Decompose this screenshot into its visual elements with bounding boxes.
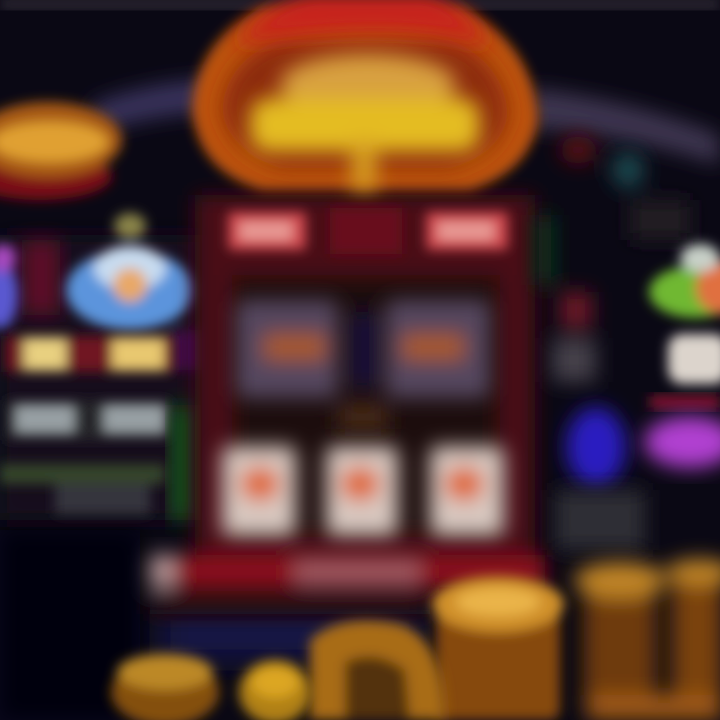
central machine: lower reels: [222, 446, 504, 536]
left machine: round blue lamp: [0, 213, 202, 370]
central machine: cabinet: [195, 195, 535, 575]
right: rainbow lamp: [649, 244, 720, 318]
right: red band: [650, 396, 720, 408]
right: pillar lights: [537, 136, 690, 382]
right: white panel: [668, 334, 720, 384]
gold coins: [111, 559, 720, 720]
right: grey stand: [555, 490, 645, 550]
central machine: golden sign lettering: [250, 54, 480, 190]
coin stack: far right: [574, 559, 720, 720]
left machine: [0, 102, 202, 520]
central machine: base strip: [150, 555, 545, 614]
central machine: [150, 0, 545, 614]
left machine: reels: [0, 400, 170, 514]
right: purple panel: [644, 416, 720, 468]
left machine: top sign: [0, 102, 122, 200]
left machine: green edge: [172, 405, 194, 520]
right: blue globe: [566, 407, 626, 487]
left machine: light strip: [5, 336, 175, 372]
coin stack: tall center: [432, 576, 564, 720]
left machine: cabinet: [0, 235, 200, 520]
coin: large ring: [310, 620, 445, 720]
coin: small left: [111, 654, 311, 720]
central machine: top pink panels: [228, 208, 508, 254]
central machine: dome sign: [192, 0, 538, 190]
central machine: upper reels: [236, 300, 490, 429]
right machines: [537, 136, 720, 550]
